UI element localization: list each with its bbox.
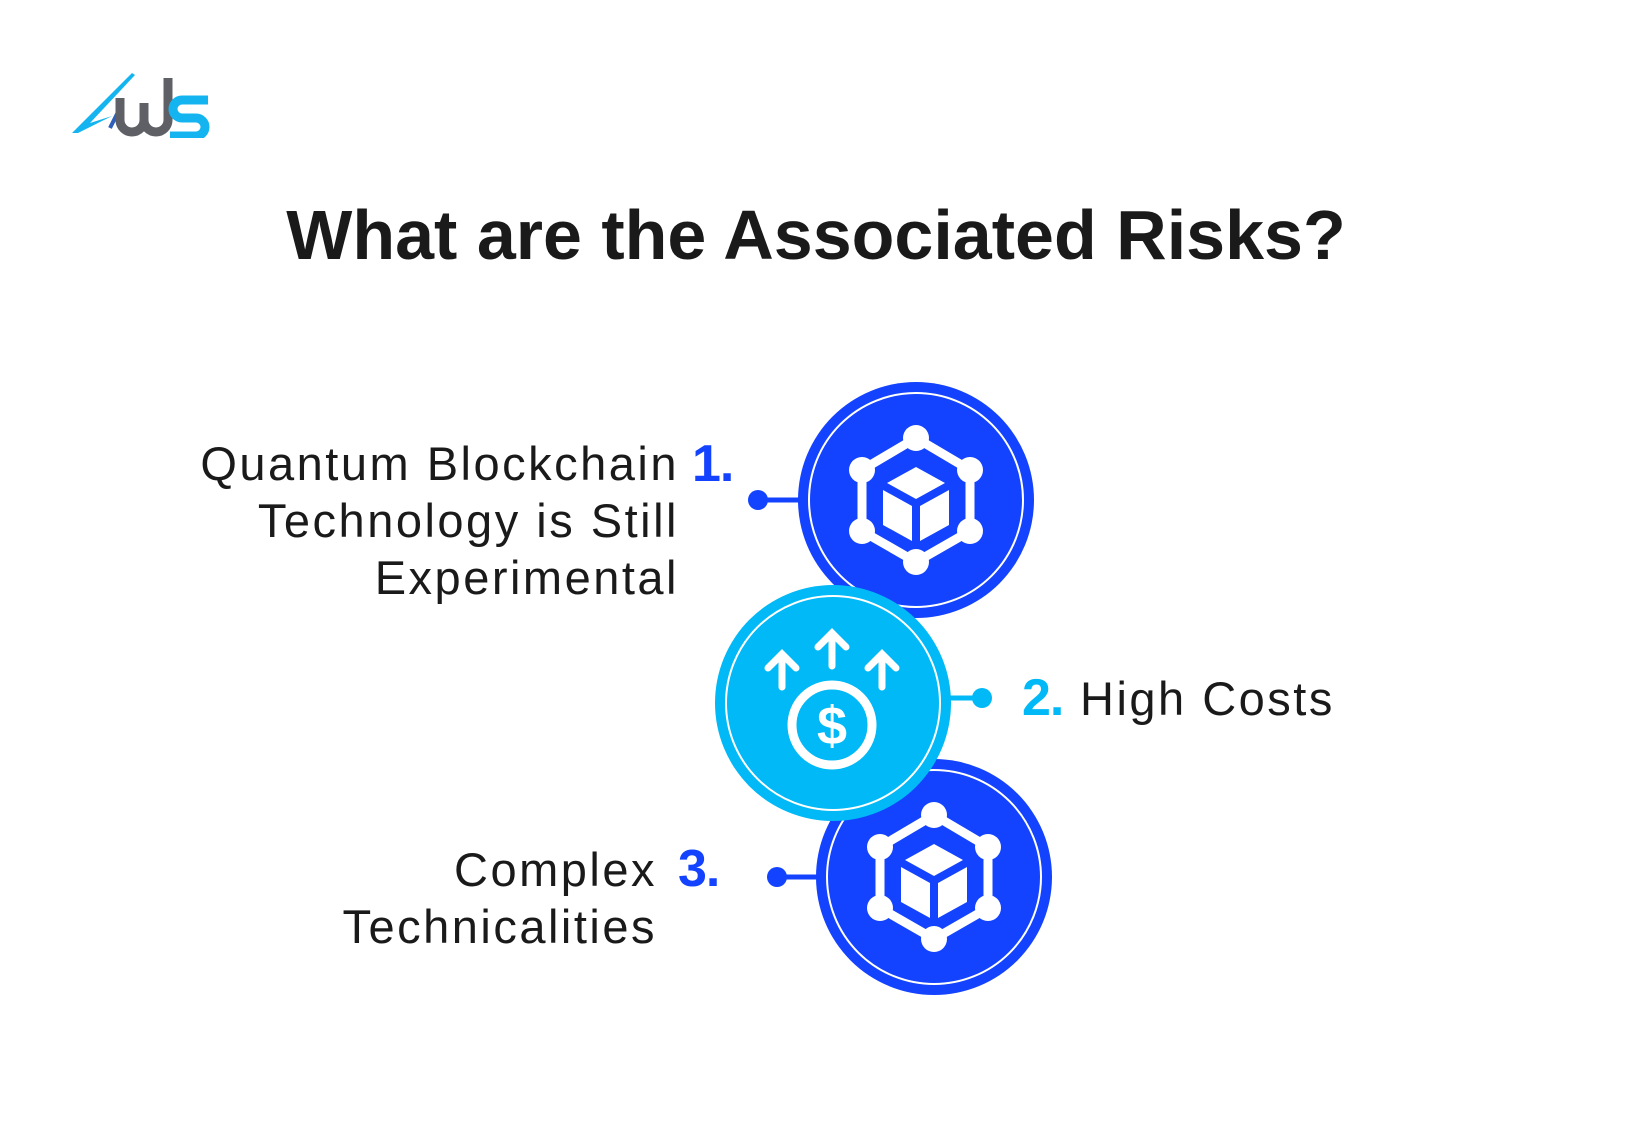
title: What are the Associated Risks? <box>286 196 1346 274</box>
circle 2 with connector <box>715 585 992 821</box>
item 1 text <box>200 437 679 604</box>
logo <box>72 73 210 138</box>
circle 1 with connector <box>748 382 1034 618</box>
number 3: 3. <box>678 840 719 898</box>
item 1 text: Experimental <box>375 551 679 604</box>
item 3 text <box>342 843 657 953</box>
number 1: 1. <box>692 435 733 493</box>
item 3 text: Complex <box>454 843 657 896</box>
item 1 text: Quantum Blockchain <box>200 437 679 490</box>
item 2 number: 2. <box>1022 669 1063 727</box>
item 3 text: Technicalities <box>342 900 657 953</box>
item 2 text: High Costs <box>1080 672 1335 725</box>
item 1 text: Technology is Still <box>258 494 679 547</box>
circle 2 with connector: $ <box>817 696 847 756</box>
circle 3 with connector <box>767 759 1052 995</box>
